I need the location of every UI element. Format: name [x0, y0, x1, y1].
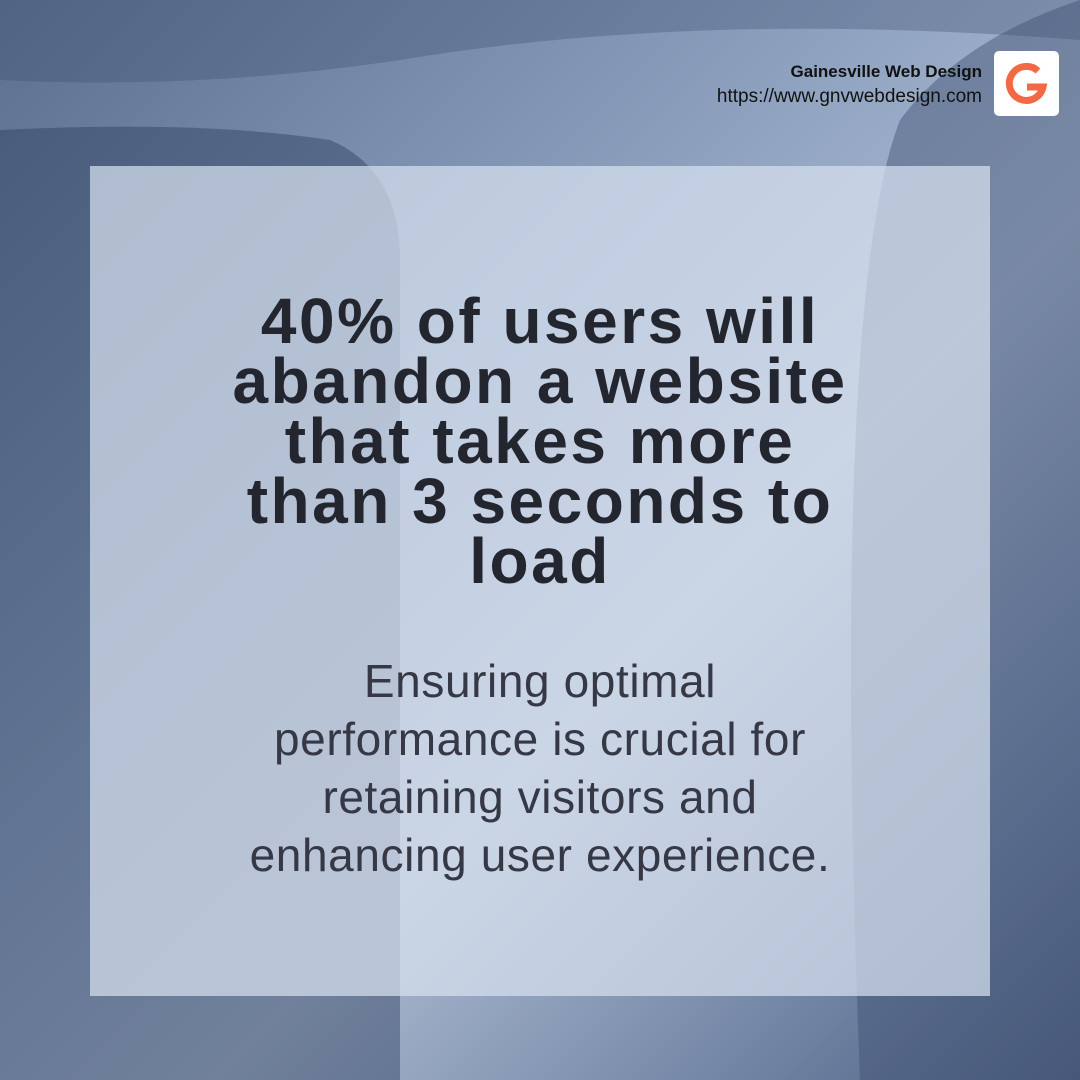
body text [250, 655, 830, 881]
header brand text [717, 62, 982, 107]
body text: retaining visitors and [322, 771, 758, 823]
body text: enhancing user experience. [250, 829, 830, 881]
body text: Ensuring optimal [364, 655, 716, 707]
title [232, 285, 848, 597]
title: abandon a website [232, 345, 848, 417]
body text: performance is crucial for [274, 713, 806, 765]
title: that takes more [285, 405, 795, 477]
icon: logo [994, 51, 1059, 116]
header brand text: https://www.gnvwebdesign.com [717, 86, 982, 107]
header brand text: Gainesville Web Design [791, 62, 982, 81]
title: than 3 seconds to [247, 465, 833, 537]
panel: main card [90, 166, 990, 996]
title: load [469, 525, 611, 597]
title: 40% of users will [261, 285, 819, 357]
